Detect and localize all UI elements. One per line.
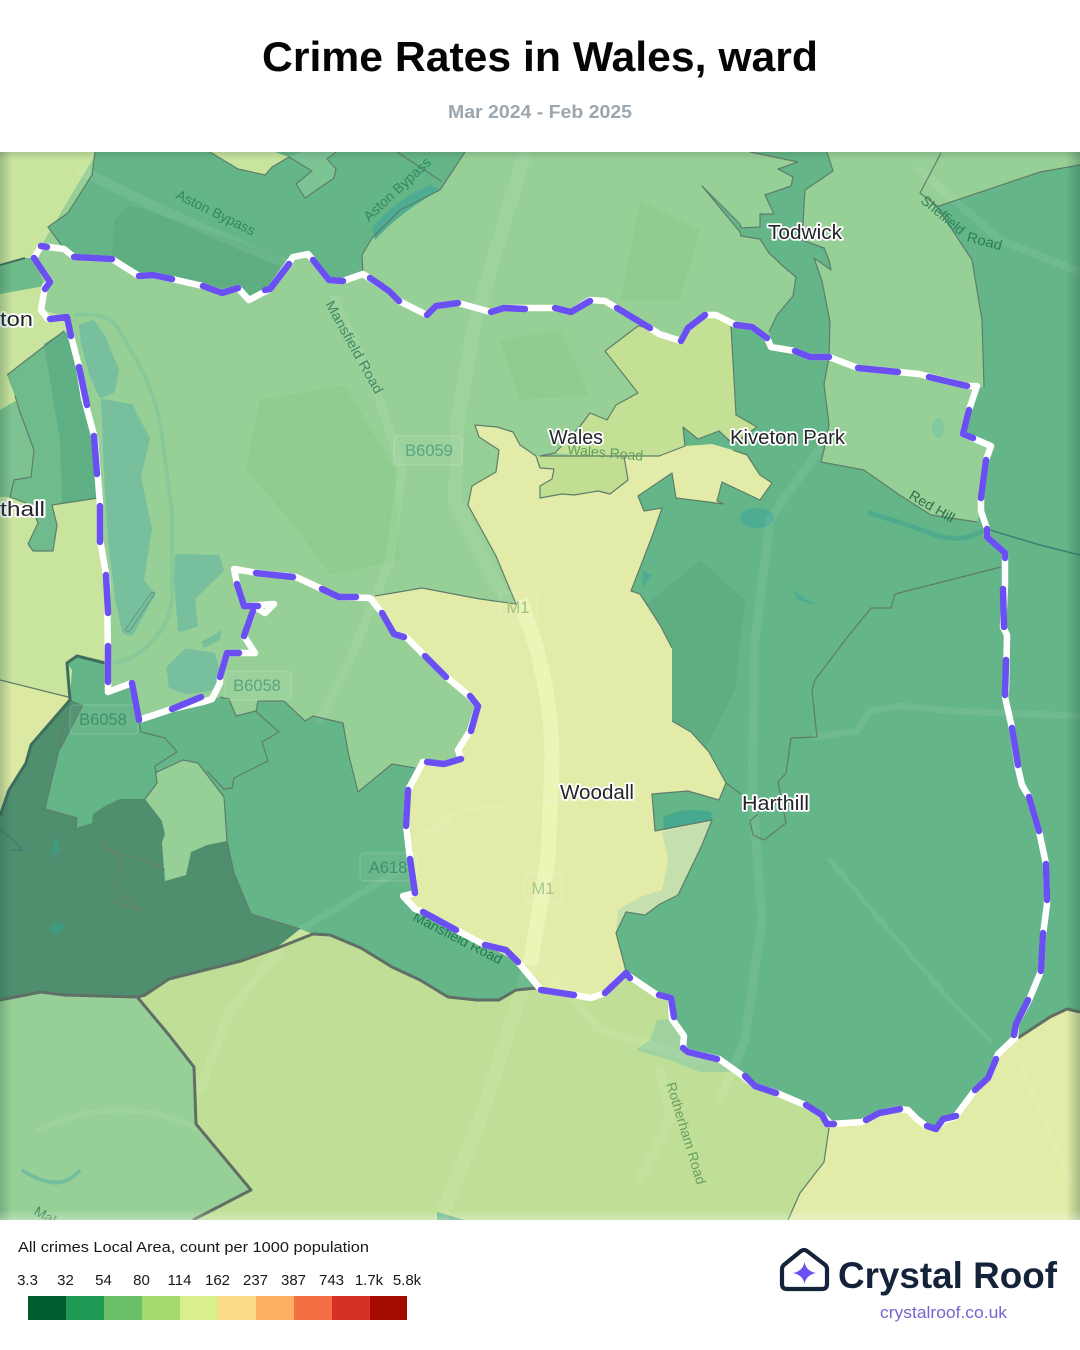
legend scale values: 162 xyxy=(205,1272,230,1289)
road labels: Wales Road xyxy=(567,441,644,464)
region: Harthill reservoir xyxy=(663,810,712,830)
legend scale values: 54 xyxy=(95,1272,112,1289)
region: pale marsh near Harthill xyxy=(616,820,712,933)
region: pale notch top xyxy=(210,152,289,175)
website url: crystalroof.co.uk xyxy=(880,1304,1008,1322)
road labels: Mansfield Road xyxy=(411,908,505,967)
region: south marsh tint xyxy=(636,1019,735,1072)
place labels: ton xyxy=(0,309,33,331)
road: M1 bright band through Woodall xyxy=(520,600,552,965)
region: mid patch top xyxy=(289,152,336,198)
region: Todwick strip xyxy=(702,152,833,357)
legend title: All crimes Local Area, count per 1000 population xyxy=(18,1239,369,1256)
road labels: Red Hill xyxy=(906,487,958,526)
region: Woodall yellow xyxy=(370,425,772,998)
logo: Crystal Roof xyxy=(782,1250,1058,1322)
region: pale wedge beside Kiveton xyxy=(683,427,733,450)
road shields: M1 xyxy=(507,599,529,617)
region: small southern green corner xyxy=(437,1212,465,1220)
region: far-west mid patch xyxy=(0,400,34,497)
icon: house with star xyxy=(782,1250,827,1289)
subtitle: date range: Mar 2024 - Feb 2025 xyxy=(448,101,632,122)
legend scale values: 1.7k xyxy=(355,1272,384,1289)
road shields: A618 xyxy=(369,859,407,877)
legend scale values: 3.3 xyxy=(17,1272,38,1289)
region: pale green island xyxy=(145,760,227,881)
region: south lime xyxy=(138,934,829,1220)
legend scale values: 743 xyxy=(319,1272,344,1289)
road shields: M1 xyxy=(532,880,554,898)
road labels: Rotherham Road xyxy=(663,1080,709,1186)
place labels: Kiveton Park xyxy=(730,427,846,449)
region: Aston top dark green xyxy=(48,152,465,300)
region: Wales village lime xyxy=(536,456,628,498)
map base: western light area xyxy=(0,152,830,1128)
road labels: Road xyxy=(965,228,1004,253)
legend scale values xyxy=(17,1272,422,1289)
legend scale values: 5.8k xyxy=(393,1272,422,1289)
road labels: Aston Bypass xyxy=(174,186,258,238)
road shields xyxy=(70,436,562,903)
legend scale values: 237 xyxy=(243,1272,268,1289)
road labels: Sheffield xyxy=(918,192,968,238)
region: west strip darker band xyxy=(44,331,98,503)
legend scale values: 32 xyxy=(57,1272,74,1289)
place labels: thall xyxy=(0,499,45,521)
region: darkest green, high count xyxy=(0,700,300,1000)
road shields: B6058 xyxy=(233,677,281,695)
road shields: B6058 xyxy=(79,711,127,729)
road labels: Mal xyxy=(32,1203,59,1228)
ward boundary: purple dashes xyxy=(34,246,1047,1129)
place labels xyxy=(0,222,846,815)
roads xyxy=(40,152,1080,1220)
area boundaries xyxy=(0,152,1080,1220)
region: west green strip xyxy=(7,331,66,550)
region: north and central mid-green xyxy=(34,152,1080,800)
ward boundary: white line xyxy=(34,246,1047,1129)
region: east darker wood xyxy=(640,560,745,760)
region: south-west B6058 and A618 green xyxy=(45,656,537,1000)
choropleth map xyxy=(0,152,1080,1228)
road labels: Mansfield Road xyxy=(322,298,387,396)
legend colour bar xyxy=(28,1296,407,1320)
road shields: B6059 xyxy=(405,442,453,460)
road labels: Aston Bypass xyxy=(360,154,434,224)
region: lime above Wales xyxy=(555,315,757,456)
region: far-west top strip xyxy=(0,258,45,294)
place labels: Wales xyxy=(549,427,603,449)
place labels: Harthill xyxy=(742,793,809,815)
legend xyxy=(17,1239,422,1320)
region: western pale yellow xyxy=(0,680,72,816)
road labels xyxy=(32,154,1004,1228)
legend scale values: 114 xyxy=(168,1272,191,1289)
place labels: Todwick xyxy=(768,222,843,244)
region: Aston darker fields xyxy=(112,205,285,300)
legend scale values: 387 xyxy=(281,1272,306,1289)
region: east dark green xyxy=(616,165,1080,1129)
region: south-west mid green xyxy=(0,992,251,1220)
logo wordmark: Crystal Roof xyxy=(838,1255,1058,1296)
water: reservoirs and river xyxy=(0,185,1080,1182)
title: Crime Rates in Wales, ward xyxy=(262,33,818,80)
map edge shading xyxy=(0,152,1080,1220)
region: subtle darker fields in the ward xyxy=(245,200,700,575)
legend scale values: 80 xyxy=(133,1272,150,1289)
place labels: Woodall xyxy=(560,782,634,804)
region: south-east yellow xyxy=(788,1009,1080,1220)
